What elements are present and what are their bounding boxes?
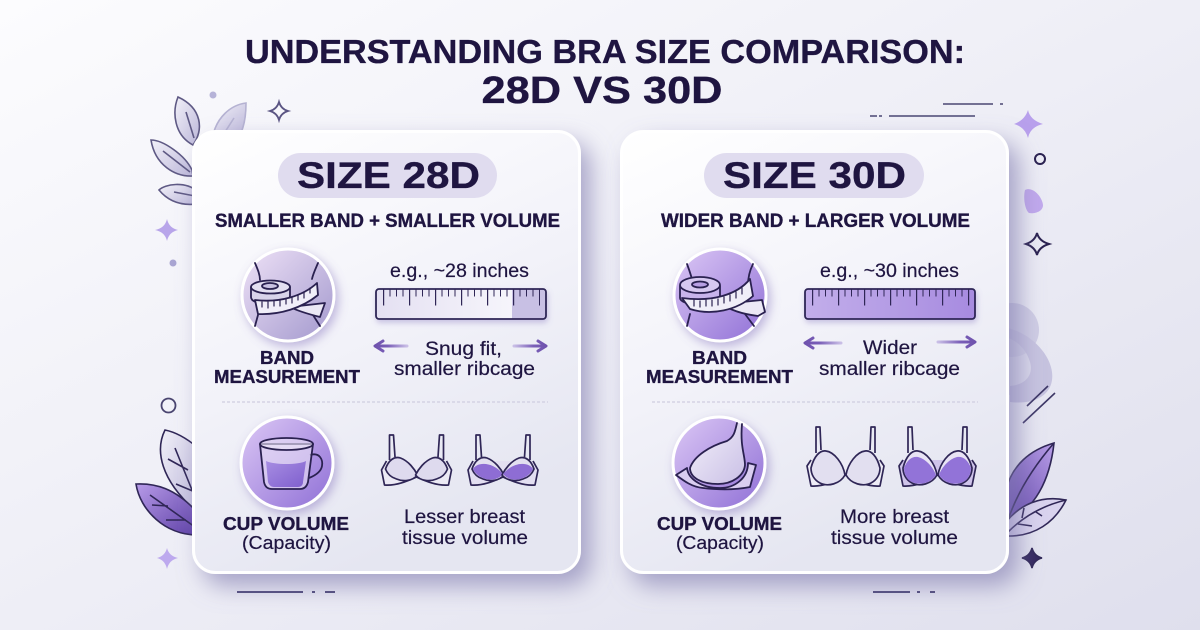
cup note	[831, 507, 958, 549]
band note	[394, 339, 535, 380]
cup volume label: CUP VOLUME	[223, 513, 349, 534]
band measurement label: MEASUREMENT	[214, 366, 361, 387]
cup note: tissue volume	[831, 528, 958, 549]
arrow left	[375, 341, 407, 351]
band measurement label	[214, 347, 361, 387]
band note: Wider	[863, 338, 918, 359]
band note	[819, 338, 960, 380]
icon: smaller filled bra	[468, 435, 538, 485]
band measurement label: BAND	[692, 347, 747, 368]
cup note	[402, 507, 528, 549]
icon: smaller empty bra	[382, 435, 452, 485]
decoration: bottom lines	[237, 591, 935, 593]
example measurement: e.g., ~30 inches	[820, 261, 959, 282]
title: UNDERSTANDING BRA SIZE COMPARISON:	[245, 33, 965, 70]
size 28D pill heading: SIZE 28D	[297, 155, 480, 196]
ruler	[805, 289, 975, 319]
size 30D pill heading	[704, 153, 924, 198]
icon: bra cup	[673, 417, 765, 509]
cup note: More breast	[840, 507, 950, 528]
cup volume label	[223, 513, 349, 553]
ruler	[376, 289, 546, 319]
band measurement label: BAND	[260, 347, 314, 368]
cup volume label: (Capacity)	[242, 532, 331, 553]
panel: size 28D	[194, 132, 580, 572]
arrow left	[805, 338, 841, 348]
cup note: tissue volume	[402, 528, 528, 549]
arrow right	[938, 337, 975, 347]
panel: size 30D	[622, 132, 1008, 572]
icon: cup of liquid	[241, 417, 333, 509]
decoration: top right lines	[870, 104, 1003, 116]
arrow right	[514, 341, 546, 351]
decoration: left bottom leaves	[136, 430, 197, 535]
decoration: left top leaves	[151, 97, 246, 204]
title	[245, 33, 965, 112]
icon: larger empty bra	[807, 427, 884, 486]
cup volume label: CUP VOLUME	[657, 513, 782, 534]
band note: smaller ribcage	[394, 359, 535, 380]
decoration: left stars and dots	[155, 92, 288, 569]
cup volume label	[657, 513, 782, 553]
cup volume label: (Capacity)	[676, 532, 764, 553]
cup note: Lesser breast	[404, 507, 526, 528]
example measurement: e.g., ~28 inches	[390, 261, 529, 282]
band measurement label	[646, 347, 794, 387]
band note: Snug fit,	[425, 339, 502, 360]
subtitle: WIDER BAND + LARGER VOLUME	[661, 211, 970, 232]
decoration: right side shapes	[985, 110, 1055, 423]
decoration: right bottom leaves	[1006, 443, 1066, 568]
icon: tape measure on wider waist	[674, 249, 766, 341]
title: 28D VS 30D	[482, 70, 722, 112]
icon: larger filled bra	[899, 427, 976, 486]
size 28D pill heading	[278, 153, 497, 198]
band measurement label: MEASUREMENT	[646, 366, 794, 387]
band note: smaller ribcage	[819, 359, 960, 380]
subtitle: SMALLER BAND + SMALLER VOLUME	[215, 211, 560, 232]
icon: tape measure on waist	[242, 249, 334, 341]
size 30D pill heading: SIZE 30D	[723, 155, 906, 196]
